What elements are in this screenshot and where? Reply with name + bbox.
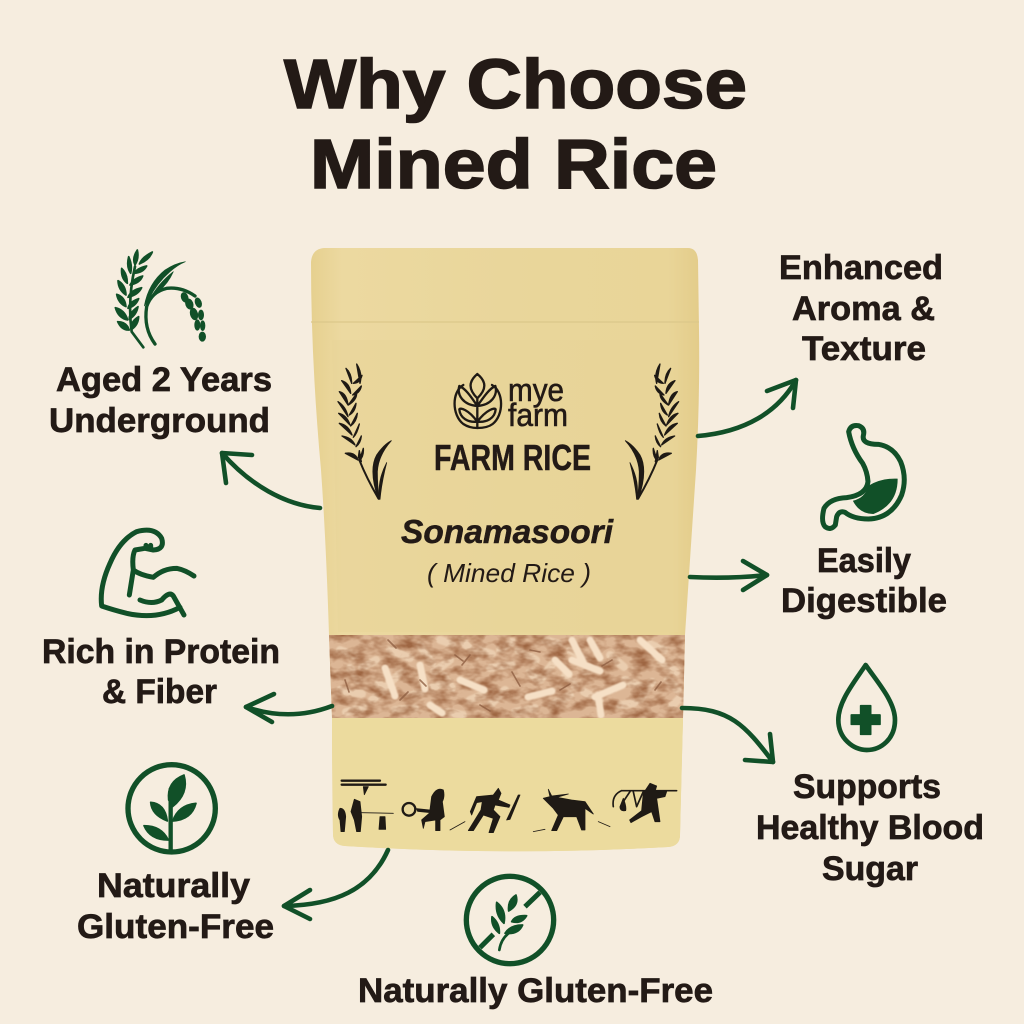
feature: aroma and texture: Texture xyxy=(802,330,926,368)
feature: aroma and texture xyxy=(779,249,943,368)
icon: crossed grain xyxy=(466,876,554,964)
rice window xyxy=(329,635,685,718)
icon: flexed arm xyxy=(101,530,194,616)
label: Underground xyxy=(49,402,270,440)
title xyxy=(284,45,747,203)
decorative wheat left xyxy=(338,364,391,499)
label: Supports xyxy=(793,768,941,806)
label: & Fiber xyxy=(102,673,217,711)
logo mark xyxy=(455,374,501,428)
farming silhouettes frieze xyxy=(338,781,677,833)
label xyxy=(49,361,272,440)
lower pouch panel xyxy=(332,718,683,851)
icon: rice stalks xyxy=(115,250,206,347)
arrow: to aged xyxy=(222,453,320,508)
label: Aged 2 Years xyxy=(56,361,272,399)
label xyxy=(42,633,280,711)
feature: easily digestible xyxy=(781,425,947,620)
feature: blood sugar xyxy=(756,665,984,888)
feature: aged underground xyxy=(49,250,272,440)
label: Digestible xyxy=(781,582,947,620)
feature: gluten-free grain xyxy=(358,876,713,1010)
label: Easily xyxy=(817,542,911,580)
arrow: to aroma xyxy=(698,380,796,436)
icon: drop with plus xyxy=(838,665,895,750)
feature: aroma and texture: Aroma & xyxy=(792,290,935,328)
pouch body xyxy=(311,248,699,851)
icon: sprout in circle xyxy=(128,765,215,852)
brand name: farm xyxy=(508,397,568,433)
label xyxy=(781,542,947,620)
label xyxy=(756,768,984,888)
icon: stomach xyxy=(823,425,904,528)
feature: gluten-free plant xyxy=(77,765,274,946)
label: Healthy Blood xyxy=(756,809,984,847)
pouch heading: FARM RICE xyxy=(434,437,591,478)
variety name: Sonamasoori xyxy=(401,513,614,550)
brand name: mye xyxy=(508,372,564,408)
feature: protein and fiber xyxy=(42,530,280,711)
label: Sugar xyxy=(822,850,918,888)
feature: aroma and texture: Enhanced xyxy=(779,249,943,287)
product pouch xyxy=(311,248,699,851)
decorative wheat right xyxy=(625,364,679,499)
label xyxy=(77,867,274,946)
arrow: to protein xyxy=(246,694,332,722)
label: Naturally xyxy=(97,867,250,905)
pouch label area xyxy=(332,340,678,632)
pouch seal line xyxy=(311,321,699,323)
title: Why Choose xyxy=(284,45,747,123)
arrow: to digestible xyxy=(690,561,767,590)
arrow: to blood sugar xyxy=(682,708,773,762)
title: Mined Rice xyxy=(310,125,717,203)
brand name xyxy=(508,372,568,433)
variety subtitle: ( Mined Rice ) xyxy=(427,558,591,588)
label: Gluten-Free xyxy=(77,908,274,946)
label: Naturally Gluten-Free xyxy=(358,972,713,1010)
label: Rich in Protein xyxy=(42,633,280,671)
arrow: to gluten-free xyxy=(284,850,388,919)
